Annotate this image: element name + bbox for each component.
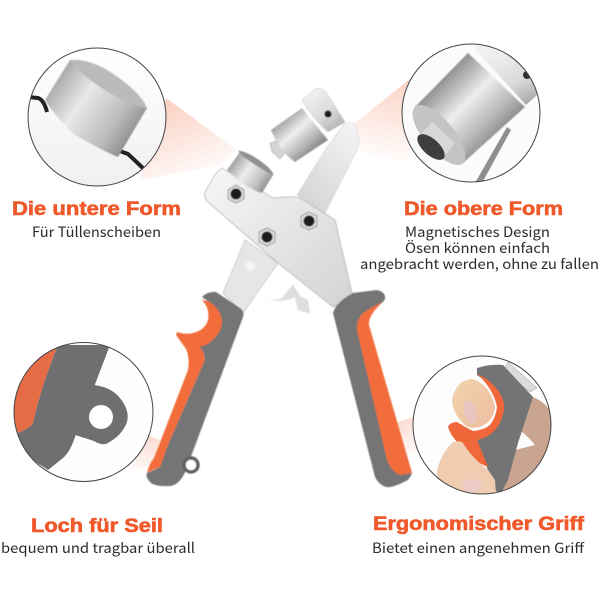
caption: upper die: angebracht werden, ohne zu fallen <box>360 254 599 274</box>
die body <box>415 53 525 163</box>
pin <box>420 122 455 156</box>
heading: cord hole: Loch für Seil <box>31 516 163 537</box>
highlight beam: grip <box>395 417 423 460</box>
inset ring: grip <box>413 356 551 494</box>
inset ring: cord hole <box>14 342 153 482</box>
inset: cord hole close-up <box>14 345 148 470</box>
caption: cord hole: bequem und tragbar überall <box>1 538 195 558</box>
upper die <box>270 88 345 162</box>
inset ring: lower die <box>28 48 166 186</box>
end face <box>412 105 466 165</box>
cord ring <box>184 458 198 472</box>
caption: lower die: Für Tüllenscheiben <box>32 222 161 242</box>
pliers <box>146 88 412 487</box>
thumb <box>452 379 495 428</box>
lower die <box>227 151 274 193</box>
caption: grip: Bietet einen angenehmen Griff <box>372 538 585 558</box>
highlight beam: lower die <box>140 98 237 180</box>
thumbnail <box>464 400 476 424</box>
orange grip <box>14 348 56 433</box>
heading: upper die: Die obere Form <box>404 199 563 220</box>
left handle <box>146 292 244 486</box>
lug <box>72 385 128 444</box>
back fingers <box>502 397 550 490</box>
highlight beam: upper die <box>353 77 412 163</box>
inset: lower die close-up <box>28 48 166 186</box>
orange grip <box>448 374 504 467</box>
inset: grip in hand <box>414 362 550 494</box>
gray grip <box>10 345 110 470</box>
caption: upper die: Magnetisches Design <box>405 222 550 242</box>
black wire <box>28 97 145 170</box>
inset: upper die close-up <box>402 45 537 182</box>
lower finger <box>437 441 496 496</box>
collar <box>474 45 537 105</box>
lug hole <box>89 405 113 429</box>
pin tip <box>417 134 445 160</box>
lower fingernail <box>462 479 482 493</box>
bolt 1 <box>228 185 244 203</box>
strut <box>475 127 511 183</box>
caption: upper die: Ösen können einfach <box>405 238 550 258</box>
upper arm <box>297 122 359 213</box>
die cylinder <box>45 60 147 157</box>
bolt 3 <box>301 212 317 230</box>
inset ring: upper die <box>402 44 540 182</box>
front plate <box>205 168 353 307</box>
heading: lower die: Die untere Form <box>12 199 181 220</box>
bolt 2 <box>259 228 275 246</box>
caption: upper die <box>360 222 599 274</box>
metal jaw <box>503 362 537 392</box>
gray grip <box>477 365 533 495</box>
rear metal parts <box>223 240 310 314</box>
heading: grip: Ergonomischer Griff <box>373 514 585 535</box>
highlight beam: cord hole <box>127 435 160 475</box>
die face <box>70 60 147 108</box>
right handle <box>333 290 412 487</box>
